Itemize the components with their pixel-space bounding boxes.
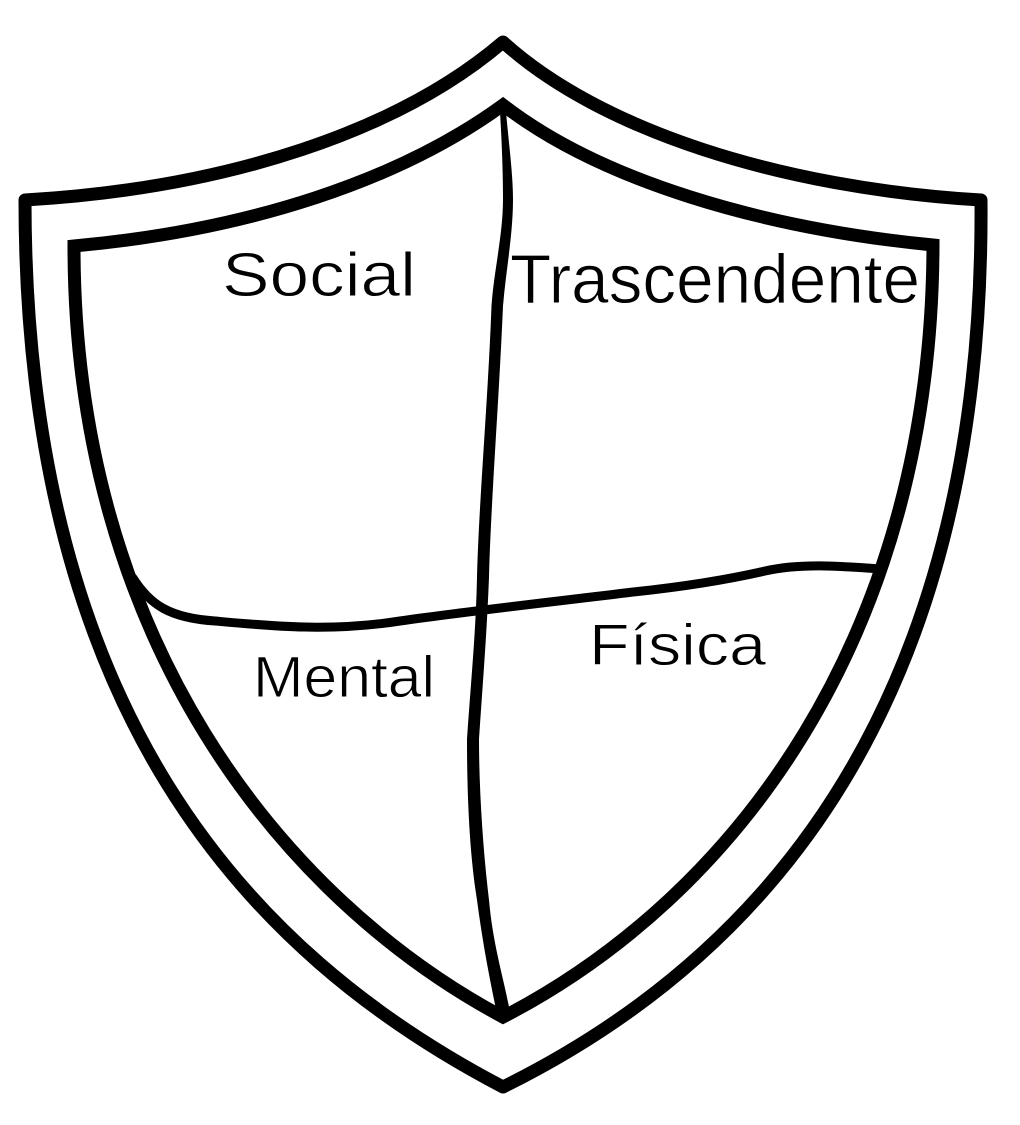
shield: inner border bbox=[74, 105, 933, 1017]
vertical divider bbox=[467, 112, 513, 1014]
label: Social: Social bbox=[222, 241, 416, 310]
label: Mental: Mental bbox=[253, 645, 435, 710]
label: Trascendente: Trascendente bbox=[510, 240, 920, 318]
horizontal divider bbox=[133, 566, 880, 627]
label: Física: Física bbox=[589, 613, 767, 678]
